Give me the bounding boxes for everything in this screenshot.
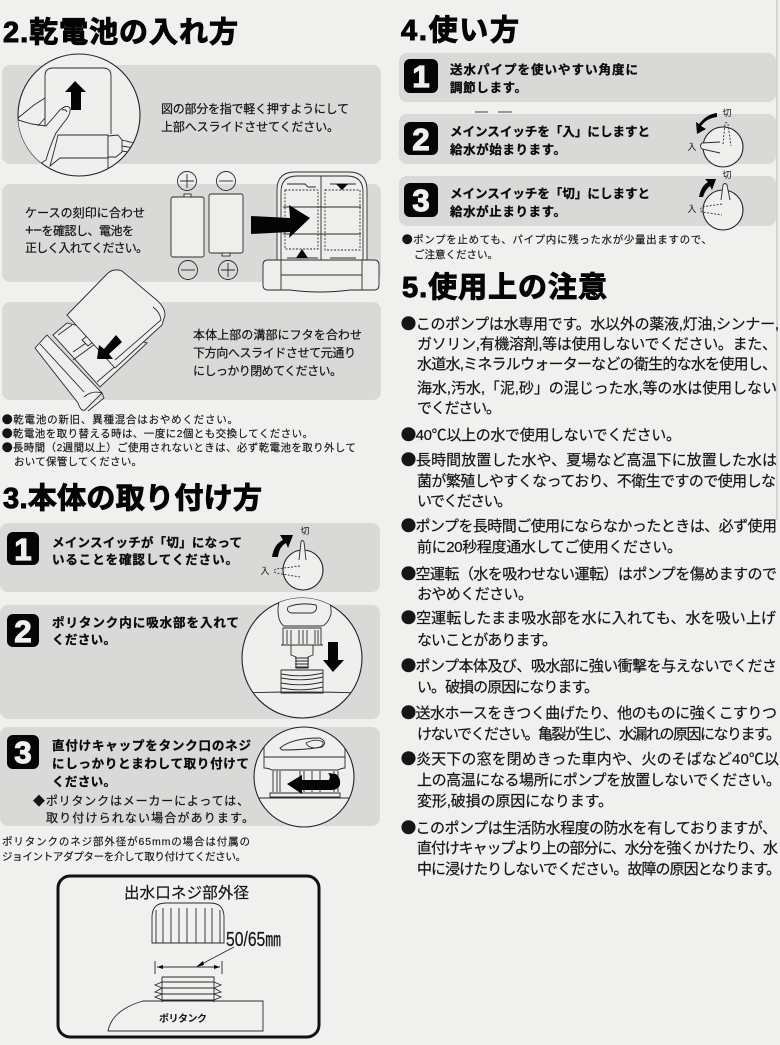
text: cautions list: ガソリン,有機溶剤,等は使用しないでください。また、 [417, 335, 777, 353]
badge: usage step 2: 2 [412, 122, 430, 157]
text: battery polarity instruction: ケースの刻印に合わせ [25, 206, 145, 220]
text: cautions list: 変形,破損の原因になります。 [417, 793, 613, 810]
icon: inserting suction part into tank [240, 596, 364, 718]
icon: switch set to off: 入 [260, 566, 270, 576]
arrow: slide cover down [97, 335, 122, 359]
text: step 3 [52, 738, 251, 789]
title: 4. how to use: 4.使い方 [401, 14, 519, 47]
title: 3. mounting: 3.本体の取り付け方 [3, 482, 262, 515]
badge: step 1: 1 [14, 532, 32, 567]
text: battery polarity instruction: +−を確認し、電池を [25, 222, 134, 239]
icon: hand pushing cover with up arrow [10, 54, 140, 176]
text: usage step 1 [450, 62, 638, 95]
text: cautions list: おやめください。 [417, 586, 533, 603]
text: cautions list: ●このポンプは生活防水程度の防水を有しておりますが、 [401, 817, 777, 838]
badge: usage step 2 [404, 122, 438, 157]
text: battery notes: ●乾電池を取り替える時は、一度に2個とも交換してください。 [2, 426, 313, 441]
badge: usage step 1: 1 [412, 59, 430, 94]
panel: outlet thread diameter diagram [58, 876, 319, 1037]
panel: insert batteries [2, 172, 381, 292]
panel: mounting step 2 [0, 596, 380, 719]
text: usage step 2: 給水が始まります。 [450, 142, 566, 157]
icon: two batteries with polarity marks [171, 172, 243, 280]
text: cautions list: けないでください。亀裂が生じ、水漏れの原因になります。 [417, 726, 780, 743]
panel: slide cover open [2, 54, 381, 176]
title: 2. battery insertion: 2.乾電池の入れ方 [3, 16, 238, 49]
text: battery polarity instruction [25, 206, 148, 255]
text: cautions list: ●このポンプは水専用です。水以外の薬液,灯油,シンナー, [401, 313, 779, 334]
text: slide instruction: 図の部分を指で軽く押すようにして [161, 101, 349, 116]
text: usage step 1: 送水パイプを使いやすい角度に [450, 62, 638, 77]
text: residual water note [402, 232, 712, 261]
text: close instruction: 下方向へスライドさせて元通り [193, 345, 356, 360]
text: cautions list: ないことがあります。 [417, 632, 557, 649]
icon: switch on [687, 108, 743, 167]
text: usage step 3: メインスイッチを「切」にしますと [450, 187, 650, 201]
heading: outlet thread diameter: 出水口ネジ部外径 [124, 884, 249, 902]
text: cautions list: ●炎天下の窓を閉めきった車内や、火のそばなど40℃以 [401, 748, 779, 769]
text: battery notes: ●乾電池の新旧、異種混合はおやめください。 [2, 412, 238, 427]
text: step 3: にしっかりとまわして取り付けて [52, 756, 249, 771]
text: battery polarity instruction: 正しく入れてください。 [25, 241, 148, 255]
text: step 3: ください。 [52, 775, 116, 789]
badge: usage step 3: 3 [412, 183, 430, 218]
text: cautions list: ●40℃以上の水で使用しないでください。 [401, 424, 681, 445]
icon: poly tank: ポリタンク [159, 1013, 207, 1025]
text: close instruction: にしっかり閉めてください。 [193, 364, 342, 378]
text: close instruction: 本体上部の溝部にフタを合わせ [193, 328, 362, 342]
panel: mounting step 3 [0, 727, 380, 827]
text: slide instruction [161, 101, 349, 134]
text: residual water note: ●ポンプを止めても、パイプ内に残った水が少量出ますので、 [402, 232, 712, 247]
text: cautions list: ●長時間放置した水や、夏場など高温下に放置した水は [401, 449, 777, 470]
panel: usage step 3 [399, 170, 776, 230]
label: 50/65 mm: 50/65㎜ [226, 929, 281, 951]
icon: switch off: 入 [687, 204, 697, 214]
text: cautions list: ●空運転したまま吸水部を水に入れても、水を吸い上げ [401, 607, 776, 628]
icon: tightening cap [250, 727, 358, 827]
text: slide instruction: 上部へスライドさせてください。 [161, 120, 339, 134]
icon: switch set to off: 切 [300, 526, 310, 536]
icon: cap [152, 903, 224, 943]
icon: switch on: 入 [687, 142, 697, 152]
text: battery notes: おいて保管してください。 [14, 455, 142, 468]
badge: step 1 [7, 532, 39, 567]
badge: step 2: 2 [14, 614, 32, 649]
text: tank maker caution: ◆ポリタンクはメーカーによっては、 [33, 794, 249, 808]
text: usage step 3: 給水が止まります。 [450, 204, 566, 219]
text: cautions list: 前に20秒程度通水してご使用ください。 [417, 539, 682, 556]
panel: usage step 2 [399, 108, 776, 167]
text: cautions list: ●空運転（水を吸わせない運転）はポンプを傷めますので [401, 563, 777, 584]
panel: usage step 1 [399, 53, 776, 102]
text: adapter note: ポリタンクのネジ部外径が65mmの場合は付属の [2, 835, 250, 848]
badge: step 2 [7, 614, 39, 649]
text: residual water note: ご注意ください。 [414, 248, 498, 261]
text: usage step 1: 調節します。 [450, 80, 527, 95]
text: cautions list: 中に浸けたりしないでください。故障の原因となります。 [417, 861, 780, 878]
text: step 1: いることを確認してください。 [52, 552, 238, 567]
text: cautions list: ●ポンプを長時間ご使用にならなかったときは、必ず使用 [401, 515, 777, 536]
icon: switch off [687, 170, 743, 230]
text: tank maker caution: 取り付けられない場合があります。 [46, 810, 254, 825]
text: step 2 [52, 615, 239, 647]
text: cautions list [401, 313, 780, 878]
icon: poly tank [108, 1001, 263, 1031]
text: usage step 3 [450, 187, 650, 219]
text: cautions list: でください。 [417, 400, 501, 417]
text: battery notes [2, 412, 356, 468]
icon: threaded neck [155, 977, 221, 1002]
title: 5. cautions: 5.使用上の注意 [402, 271, 607, 304]
text: step 2: ポリタンク内に吸水部を入れて [52, 615, 239, 630]
panel: close cover [2, 270, 381, 411]
text: cautions list: 直付けキャップより上の部分に、水分を強くかけたり、水 [417, 840, 778, 857]
badge: usage step 1 [404, 59, 438, 94]
arrow: dimension leader [155, 947, 234, 974]
badge: step 3: 3 [14, 735, 32, 770]
badge: step 3 [7, 735, 39, 770]
text: cautions list: 海水,汚水,「泥,砂」の混じった水,等の水は使用しない [417, 379, 777, 397]
text: step 2: ください。 [52, 633, 116, 647]
text: step 1: メインスイッチが「切」になって [52, 535, 242, 550]
text: step 3: 直付けキャップをタンク口のネジ [52, 738, 251, 753]
icon: switch on: 切 [722, 108, 732, 118]
arrow: battery into compartment [251, 205, 310, 238]
badge: usage step 3 [404, 183, 438, 218]
icon: device with sliding cover [35, 270, 165, 411]
text: cautions list: い。破損の原因になります。 [417, 679, 599, 696]
text: cautions list: ●ポンプ本体及び、吸水部に強い衝撃を与えないでくださ [401, 655, 777, 676]
text: usage step 2: メインスイッチを「入」にしますと [450, 125, 650, 139]
icon: switch off: 切 [722, 170, 732, 180]
text: cautions list: 菌が繁殖しやすくなっており、不衛生ですので使用しな [417, 473, 776, 490]
panel: mounting step 1 [0, 523, 380, 592]
text: tank maker caution [33, 794, 254, 825]
text: close instruction [193, 328, 362, 378]
text: usage step 2 [450, 125, 650, 157]
text: cautions list: 上の高温になる場所にポンプを放置しないでください。 [417, 772, 780, 789]
text: cautions list: ●送水ホースをきつく曲げたり、他のものに強くこすりつ [401, 702, 777, 723]
icon: battery compartment [263, 172, 379, 292]
text: battery notes: ●長時間（2週間以上）ご使用されないときは、必ず乾電池を取り外して [2, 440, 356, 455]
text: cautions list: 水道水,ミネラルウォーターなどの衛生的な水を使用し、 [417, 356, 777, 373]
icon: switch set to off [260, 526, 323, 590]
text: cautions list: いでください。 [417, 493, 512, 510]
text: step 1 [52, 535, 242, 567]
text: adapter note: ジョイントアダプターを介して取り付けてください。 [2, 850, 246, 863]
text: adapter note [2, 835, 250, 863]
